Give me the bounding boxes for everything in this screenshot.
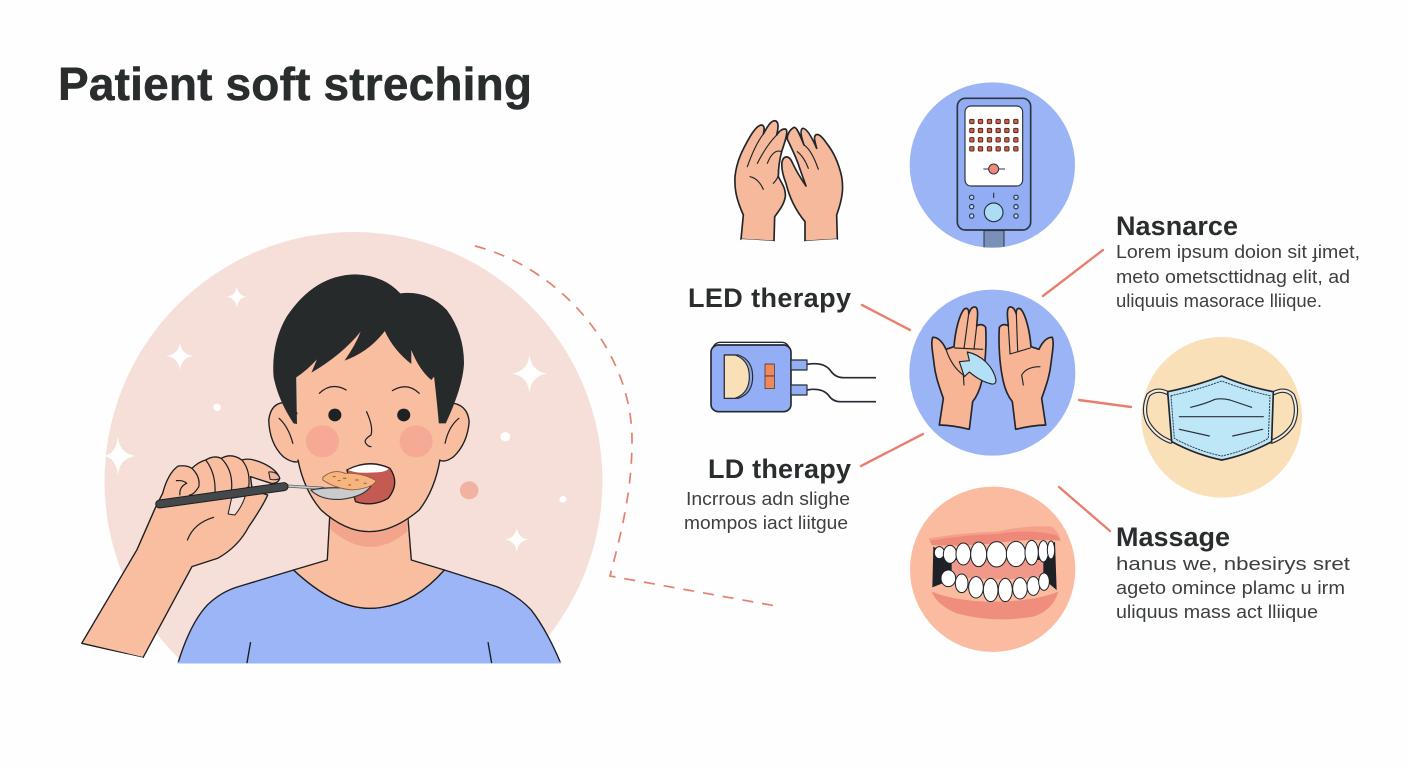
- icon: praying hands: [735, 121, 843, 242]
- blue circle: [910, 82, 1075, 248]
- text block: LD therapy: mompos iact liitgue: [684, 513, 848, 533]
- neck shadow: [330, 517, 408, 547]
- control buttons: [969, 193, 1018, 222]
- text block: Nasnarce: meto ometscttidnag elit, ad: [1116, 267, 1350, 287]
- illustration: patient eating with spoon: [81, 232, 773, 664]
- pink dot: [460, 481, 478, 499]
- pleats: [1179, 399, 1263, 436]
- text block: Massage: Massage: [1116, 522, 1230, 552]
- thumbnail: [269, 472, 280, 480]
- text block: Nasnarce: Lorem ipsum doion sit ɟimet,: [1116, 242, 1360, 262]
- person figure: [80, 274, 566, 663]
- icon: LED panel device: [910, 82, 1075, 251]
- ear loops: [1145, 391, 1296, 442]
- face: [296, 323, 440, 532]
- peach circle: [1141, 337, 1302, 498]
- left hand: [932, 307, 986, 429]
- mask body: [1168, 376, 1273, 460]
- screen indicator: [983, 167, 1005, 170]
- icon: open hands with mouth guard: [909, 290, 1075, 456]
- text block: Massage: ageto omince plamc u irm: [1116, 578, 1345, 598]
- finger lines: [176, 458, 249, 540]
- ears: [269, 403, 300, 462]
- gum: [952, 560, 1043, 579]
- lower lip: [932, 592, 1058, 619]
- icon: face mask: [1141, 337, 1302, 498]
- salmon circle: [910, 487, 1075, 652]
- text block: LD therapy: Incrrous adn slighe: [686, 489, 850, 509]
- cheeks: [306, 425, 339, 457]
- background circle: [104, 232, 602, 658]
- text block: Massage: uliquus mass act lliique: [1116, 602, 1318, 622]
- shirt hem lines: [247, 643, 492, 663]
- eyes: [328, 409, 341, 421]
- upper teeth: [934, 540, 1055, 567]
- text block: Nasnarce: Nasnarce: [1116, 211, 1238, 241]
- neck: [294, 513, 444, 608]
- icon: teeth: [910, 487, 1075, 652]
- nose: [365, 412, 372, 447]
- dark mouth corners: [932, 542, 1057, 590]
- LED matrix: [970, 119, 1018, 151]
- food on spoon: [323, 472, 376, 490]
- gap between fingers and palm: [228, 496, 245, 515]
- text block: Nasnarce: uliquuis masorace lliique.: [1116, 291, 1322, 311]
- label: LED therapy: LED therapy: [688, 283, 851, 313]
- blue circle: [909, 290, 1075, 456]
- text block: Massage: hanus we, nbesirys sret: [1116, 554, 1350, 574]
- connector lines: [861, 250, 1131, 531]
- icon: small LED device with wires: [711, 342, 876, 412]
- stitching: [1171, 381, 1270, 456]
- text block: Massage: [1116, 522, 1350, 622]
- sparkles and dots: [104, 287, 566, 552]
- device body: [957, 98, 1031, 230]
- text block: LD therapy: LD therapy: [708, 454, 851, 484]
- hair: [273, 274, 464, 424]
- lower teeth: [941, 570, 1049, 602]
- spoon: [160, 486, 371, 504]
- mouth: [347, 464, 395, 504]
- dashed curved connector: [475, 246, 776, 606]
- eyebrows: [319, 387, 419, 393]
- text block: LD therapy: [684, 454, 851, 533]
- title: Patient soft streching: [58, 58, 532, 110]
- mouth guard: [959, 352, 996, 384]
- arm and hand: [82, 456, 280, 658]
- upper lip: [928, 526, 1061, 546]
- shirt: [178, 570, 560, 663]
- right hand: [999, 307, 1053, 429]
- device stem: [984, 231, 1004, 251]
- device screen: [965, 106, 1023, 186]
- text block: Nasnarce: [1116, 211, 1360, 311]
